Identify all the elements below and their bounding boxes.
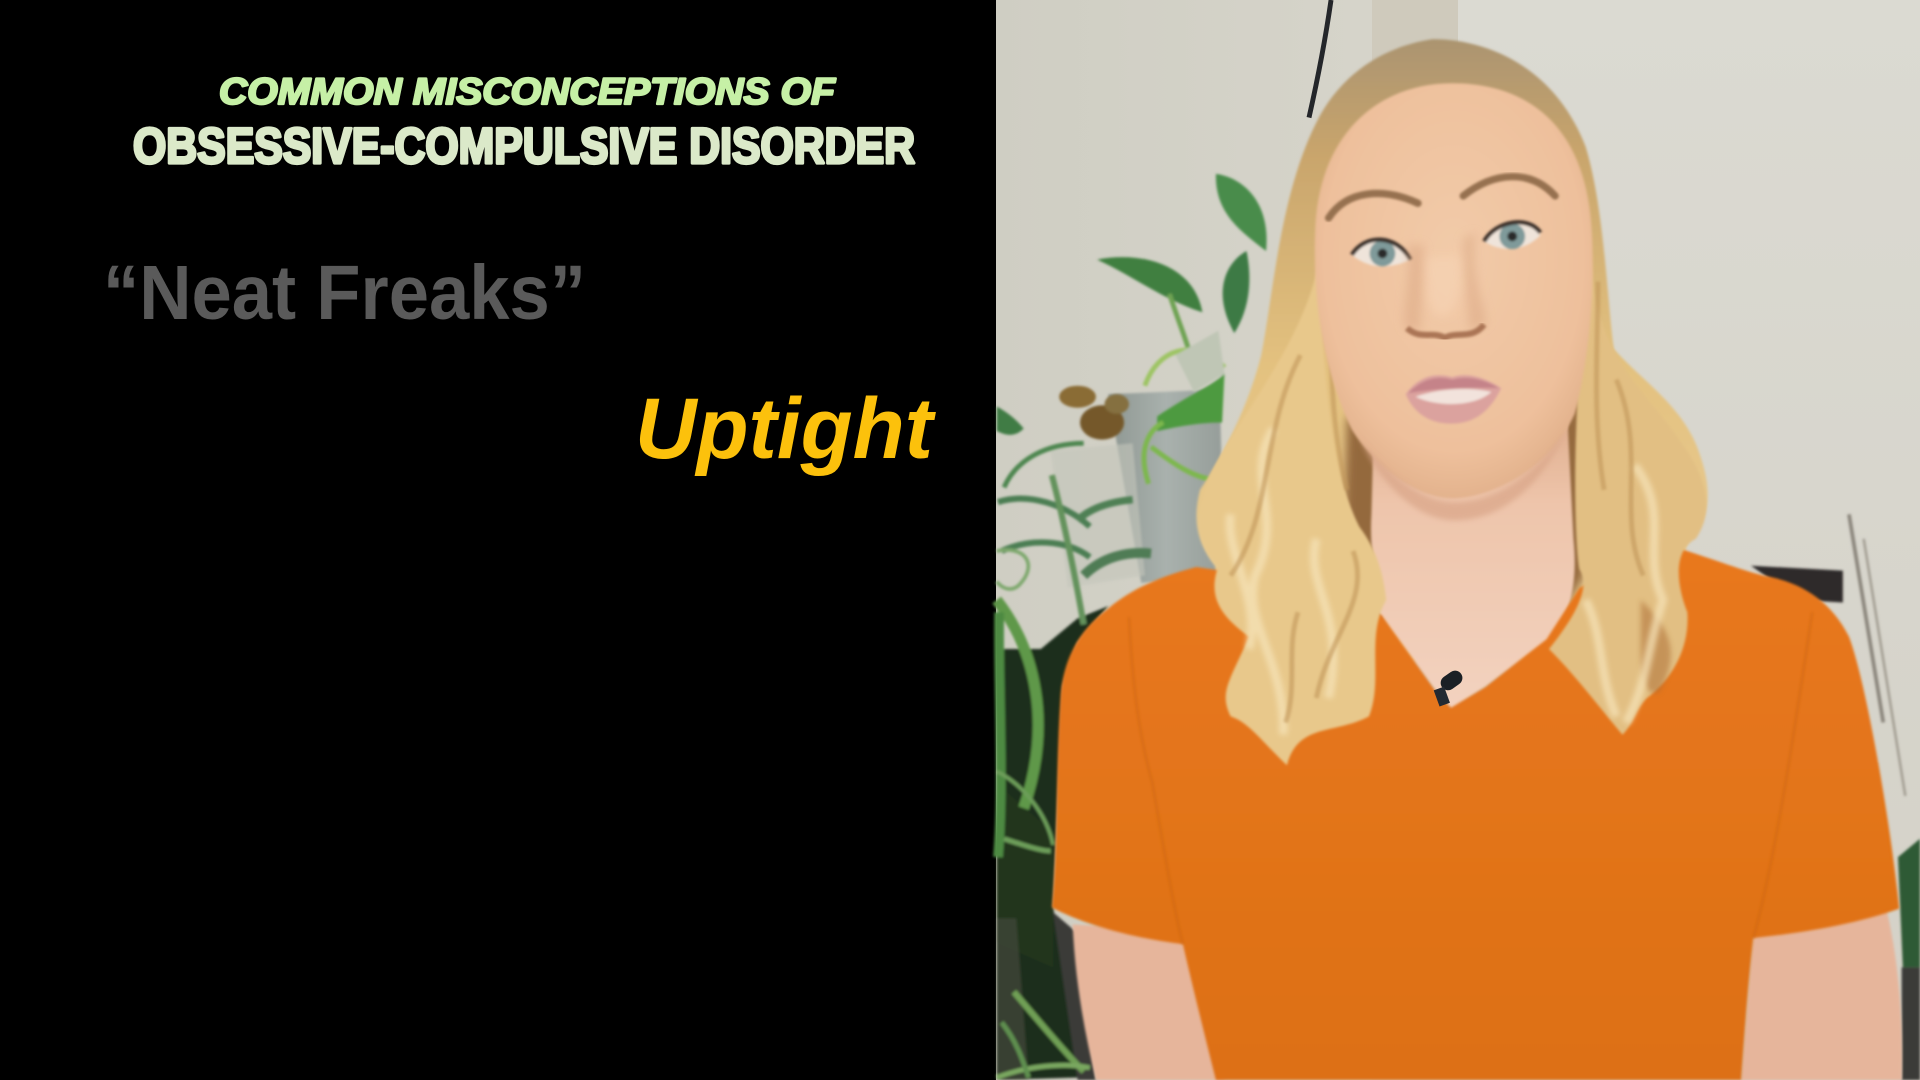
nose bbox=[1404, 233, 1487, 338]
highlighted misconception: uptight: Uptight bbox=[635, 381, 936, 477]
bucket bbox=[1108, 389, 1224, 583]
photo background wall bbox=[996, 0, 1920, 1080]
dried flower bbox=[1059, 386, 1129, 440]
heading: common misconceptions of: COMMON MISCONCEPTIONS OF bbox=[219, 71, 836, 112]
left arm bbox=[1073, 924, 1224, 1080]
hair highlights bbox=[1230, 429, 1663, 735]
neck bbox=[1371, 416, 1575, 710]
glass jar bbox=[1051, 443, 1145, 588]
hair lock: left bbox=[1200, 257, 1386, 765]
mouth bbox=[1406, 375, 1501, 424]
eyebrows bbox=[1329, 177, 1555, 218]
photo panel: presenter bbox=[996, 0, 1920, 1080]
back hair bbox=[1196, 39, 1708, 762]
orange t-shirt bbox=[1052, 546, 1899, 1080]
cable bbox=[1309, 0, 1331, 118]
plant: pothos leaves bbox=[1097, 174, 1267, 484]
left black panel bbox=[0, 0, 996, 1080]
plant: left foliage bbox=[997, 407, 1151, 1080]
right arm bbox=[1741, 906, 1902, 1080]
shaded hair behind neck bbox=[1341, 404, 1585, 624]
lapel microphone bbox=[1434, 668, 1465, 706]
shelf and rods at right bbox=[1751, 514, 1920, 1080]
heading: obsessive-compulsive disorder: OBSESSIVE-COMPULSIVE DISORDER bbox=[133, 118, 915, 174]
hair lock: right bbox=[1549, 263, 1706, 735]
sleeve seams bbox=[1129, 612, 1812, 944]
face bbox=[1315, 83, 1593, 498]
eyes bbox=[1352, 222, 1540, 266]
faded misconception: neat freaks: “Neat Freaks” bbox=[103, 250, 586, 336]
dark underside of right lock bbox=[1641, 600, 1671, 693]
jaw shadow bbox=[1359, 429, 1567, 520]
